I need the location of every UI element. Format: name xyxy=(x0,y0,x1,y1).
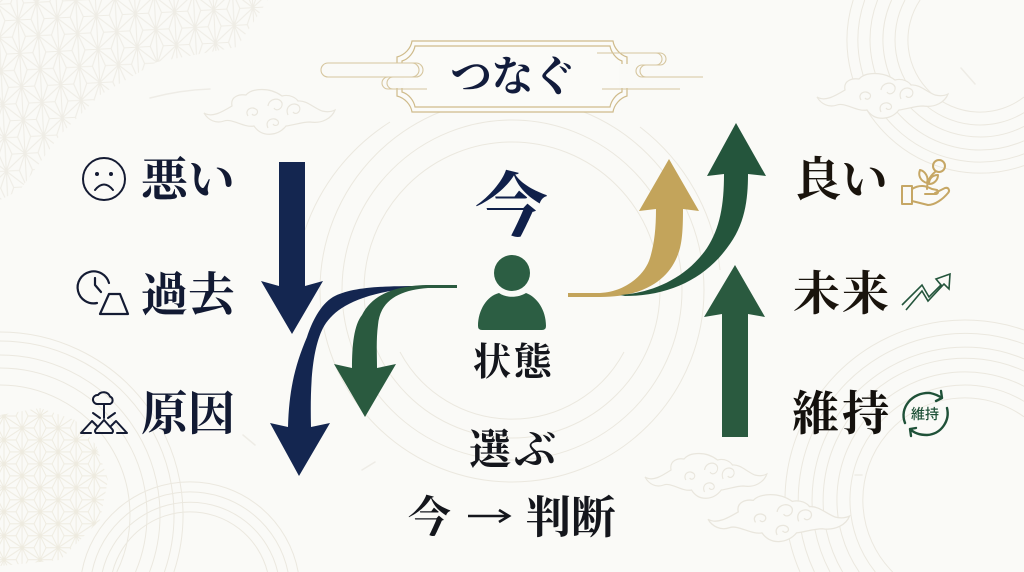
label: choose: 選ぶ xyxy=(469,428,556,474)
arrow: gold curved up xyxy=(568,159,699,297)
title banner xyxy=(321,41,703,112)
icon: clock and weight xyxy=(78,271,128,314)
icon: plant in hand xyxy=(902,160,949,205)
title text: つなぐ xyxy=(450,55,575,101)
arrow: green curved down xyxy=(334,285,457,417)
label: now to decision xyxy=(408,493,616,543)
banner scroll lines xyxy=(321,53,703,89)
icon: cause tree xyxy=(81,392,127,433)
right column xyxy=(792,155,950,441)
decorative clouds xyxy=(204,74,948,542)
label: maintain: 維持 xyxy=(792,389,889,441)
label: future: 未来 xyxy=(793,269,889,321)
arrow: navy straight down xyxy=(261,162,323,334)
label: good: 良い xyxy=(794,155,888,207)
label: past: 過去 xyxy=(141,270,237,322)
left column xyxy=(78,155,237,441)
arrow: navy curved down xyxy=(270,286,420,476)
label: now to decision: 判断 xyxy=(526,493,616,543)
icon: maintain cycle: 維持 xyxy=(911,406,939,422)
label: state: 状態 xyxy=(473,342,554,384)
center column xyxy=(408,169,616,543)
arrow: green curved up xyxy=(620,123,766,296)
label: cause: 原因 xyxy=(141,389,235,441)
icon: rising trend xyxy=(902,274,950,310)
icon: person xyxy=(478,255,546,330)
label: now to decision: 今 xyxy=(408,494,451,542)
icon: maintain cycle xyxy=(904,391,948,436)
icon: sad face xyxy=(83,158,125,200)
heading: now: 今 xyxy=(475,169,548,246)
label: bad: 悪い xyxy=(141,155,235,207)
banner frame xyxy=(397,41,627,112)
arrow: green straight up xyxy=(704,265,765,437)
